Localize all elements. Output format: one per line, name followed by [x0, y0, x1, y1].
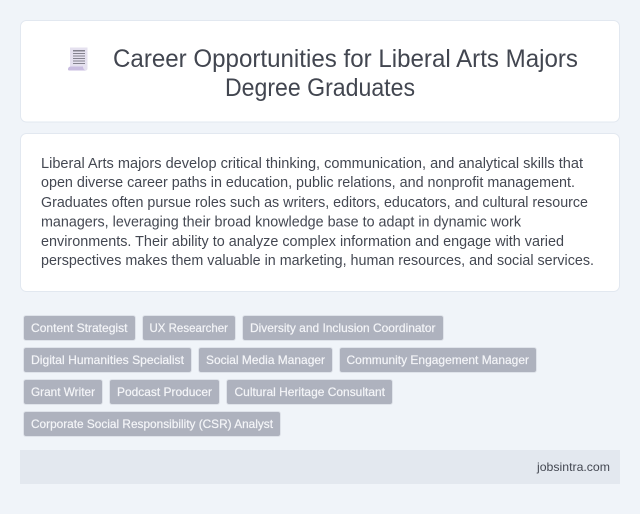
tag: Grant Writer	[24, 380, 102, 404]
panel: description	[20, 134, 620, 292]
description text: managers, leveraging their broad knowledge base to adapt in dynamic work	[41, 214, 522, 230]
tag: Content Strategist: Content Strategist	[31, 321, 128, 335]
tag: Grant Writer: Grant Writer	[31, 385, 95, 399]
description text	[41, 156, 594, 269]
tag: Digital Humanities Specialist	[24, 348, 192, 372]
description text: open diverse career paths in education, public relations, and nonprofit management.	[41, 175, 575, 191]
tag: Corporate Social Responsibility (CSR) Analyst: Corporate Social Responsibility (CSR) Analyst	[31, 417, 274, 431]
panel: header card	[20, 20, 620, 122]
tag: Diversity and Inclusion Coordinator: Diversity and Inclusion Coordinator	[250, 321, 436, 335]
tag: Community Engagement Manager: Community Engagement Manager	[346, 353, 529, 367]
description text: perspectives makes them valuable in marketing, human resources, and social services.	[41, 253, 594, 269]
tag: Cultural Heritage Consultant: Cultural Heritage Consultant	[234, 385, 386, 399]
tag: Cultural Heritage Consultant	[226, 380, 392, 404]
footer bar	[20, 450, 620, 484]
tag: Content Strategist	[24, 316, 136, 340]
tag: Social Media Manager	[198, 348, 332, 372]
tag: Digital Humanities Specialist: Digital Humanities Specialist	[31, 353, 185, 367]
tag: UX Researcher	[142, 316, 236, 340]
description text: environments. Their ability to analyze complex information and engage with varied	[41, 234, 564, 250]
tag: Community Engagement Manager	[340, 348, 536, 372]
tag: UX Researcher: UX Researcher	[150, 321, 228, 335]
description text: Graduates often pursue roles such as writers, editors, educators, and cultural resource	[41, 195, 588, 211]
tag: Social Media Manager: Social Media Manager	[206, 353, 325, 367]
tag: Diversity and Inclusion Coordinator	[242, 316, 444, 340]
title: Degree Graduates	[225, 74, 415, 102]
tag: Podcast Producer	[110, 380, 220, 404]
footer text: jobsintra.com: jobsintra.com	[536, 460, 610, 474]
tag: Corporate Social Responsibility (CSR) Analyst	[24, 412, 280, 436]
tag: Podcast Producer: Podcast Producer	[117, 385, 212, 399]
career tags	[24, 316, 536, 436]
icon: paper scroll	[68, 48, 88, 70]
title: Career Opportunities for Liberal Arts Majors	[113, 45, 578, 73]
title	[113, 45, 578, 102]
description text: Liberal Arts majors develop critical thinking, communication, and analytical skills that	[41, 156, 583, 172]
